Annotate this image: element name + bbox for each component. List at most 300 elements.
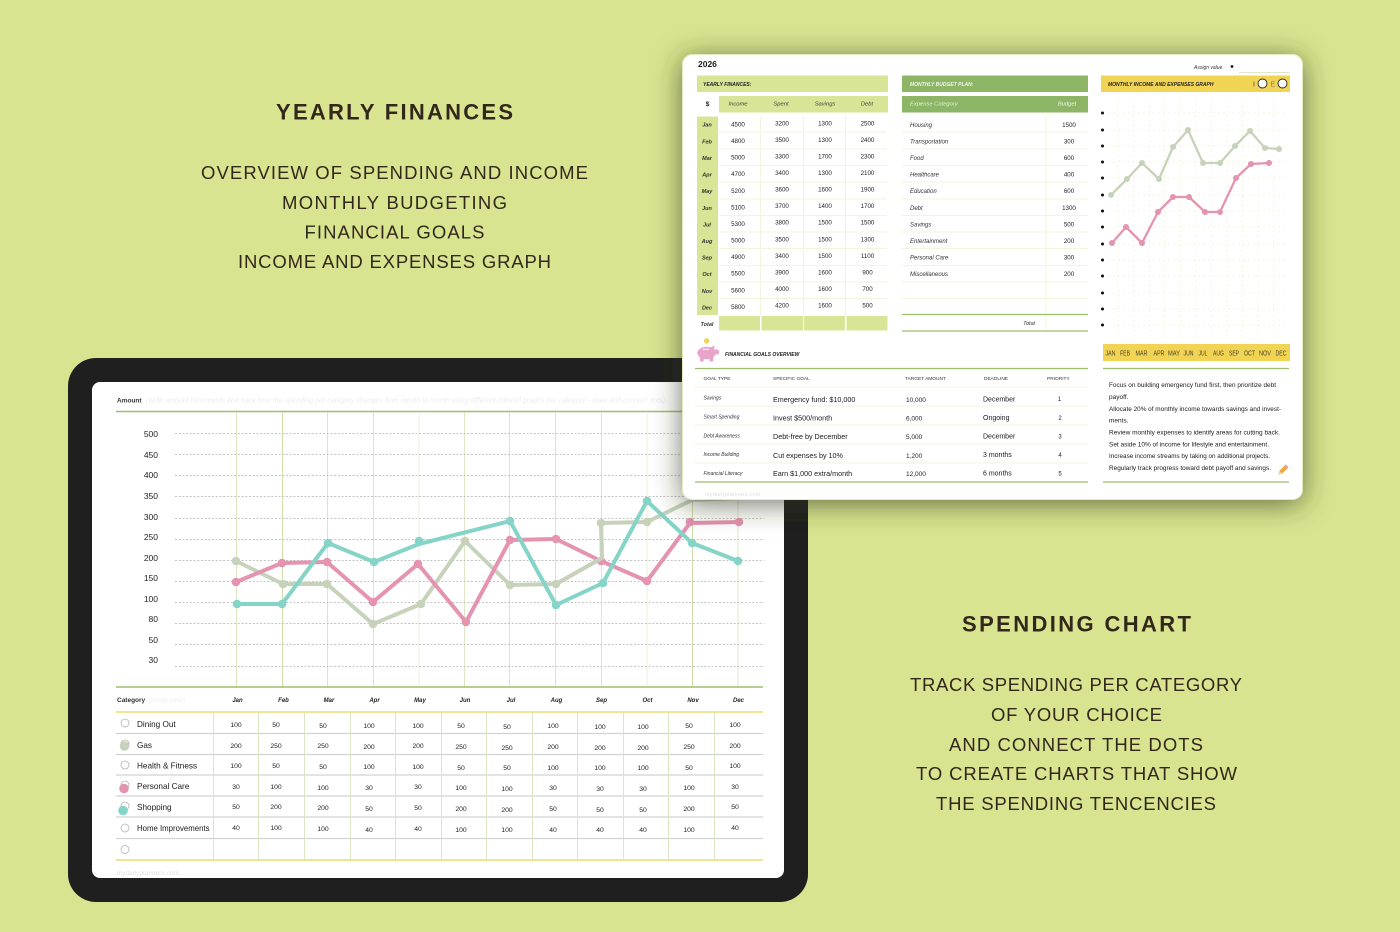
table values: 100 — [729, 763, 741, 770]
expense categories: Personal Care — [910, 256, 949, 262]
table values — [230, 722, 741, 834]
month column: Apr — [701, 172, 713, 178]
y axis labels: 200 — [144, 553, 158, 563]
income, spent, savings and debt values: 4800 — [731, 138, 745, 145]
graph heading band with legend — [1101, 76, 1290, 92]
table values: 40 — [365, 827, 373, 834]
table values: 100 — [317, 826, 329, 833]
table values: 50 — [414, 805, 422, 812]
budget values: 600 — [1064, 155, 1075, 162]
deadlines: December — [983, 434, 1016, 440]
table values: 50 — [232, 804, 240, 811]
income, spent, savings and debt values: 4200 — [775, 302, 789, 310]
income, spent, savings and debt values: 1500 — [818, 253, 832, 260]
icon: pencil — [1276, 464, 1289, 477]
y axis labels: 30 — [149, 655, 158, 665]
specific goals: Emergency fund: $10,000 — [773, 395, 855, 404]
panel: yearly finances planner page — [682, 54, 1302, 500]
table values: 200 — [317, 805, 329, 812]
table values: 200 — [637, 745, 649, 752]
income, spent, savings and debt values: 5600 — [731, 288, 745, 294]
month column: Dec — [702, 306, 712, 312]
table header: (assign color) — [149, 698, 185, 704]
income, spent, savings and debt values: 2300 — [861, 154, 875, 160]
text block: spending chart description: THE SPENDING TENCENCIES — [936, 793, 1216, 814]
target amounts: 10,000 — [906, 397, 926, 404]
income, spent, savings and debt values: 3500 — [775, 137, 789, 144]
table values: 50 — [731, 804, 739, 811]
y axis labels: 50 — [149, 635, 158, 645]
table header: Dec — [733, 698, 745, 704]
table values: 200 — [455, 806, 467, 813]
table values: 50 — [639, 807, 647, 814]
graph month band: JAN — [1106, 350, 1116, 358]
goals table header: GOAL TYPE — [704, 376, 730, 382]
table header: Feb — [278, 698, 289, 704]
goal types: Income Building — [704, 452, 739, 458]
expense categories: Transportation — [910, 140, 949, 146]
table values: 50 — [503, 765, 511, 772]
table values: 100 — [455, 785, 467, 792]
budget values: 500 — [1064, 222, 1075, 228]
budget values: 200 — [1064, 238, 1075, 245]
month column: Jan — [702, 122, 712, 128]
icon: piggy bank with coin — [697, 338, 719, 362]
graph month band: OCT — [1244, 350, 1256, 358]
y axis labels: 300 — [144, 512, 158, 522]
income, spent, savings and debt values: 1600 — [818, 270, 832, 276]
expense categories: Food — [910, 156, 924, 162]
table values: 250 — [270, 743, 282, 750]
total row: Total — [701, 322, 714, 328]
series: sage crossing segment — [556, 523, 602, 584]
column headers: Savings — [815, 102, 835, 108]
budget heading band: MONTHLY BUDGET PLAN: — [910, 82, 974, 88]
income, spent, savings and debt values: 1500 — [861, 220, 875, 226]
income, spent, savings and debt values: 5300 — [731, 221, 745, 228]
table header: Category — [117, 697, 146, 704]
income, spent, savings and debt values: 1300 — [818, 137, 832, 144]
notes text: Focus on building emergency fund first, then prioritize debt — [1109, 382, 1276, 389]
column headers — [706, 96, 888, 112]
table header: May — [414, 698, 426, 704]
table values: 50 — [319, 764, 327, 771]
y axis labels: 450 — [144, 450, 158, 460]
notes text — [1109, 382, 1281, 472]
table values: 40 — [639, 827, 647, 834]
deadlines: 6 months — [983, 470, 1012, 478]
series: pink — [232, 518, 743, 626]
goals table lines — [695, 368, 1088, 482]
table values: 100 — [501, 786, 513, 793]
budget header band — [902, 96, 1088, 112]
income, spent, savings and debt values: 1400 — [818, 203, 832, 210]
category names: Home Improvements — [137, 824, 210, 833]
table values: 50 — [685, 723, 693, 730]
table header: Aug — [550, 698, 563, 704]
goals table header: SPECIFIC GOAL — [773, 376, 810, 382]
text block: spending chart description — [910, 674, 1242, 814]
income, spent, savings and debt values: 3500 — [775, 236, 789, 244]
income, spent, savings and debt values: 3300 — [775, 154, 789, 160]
chart instruction line — [116, 398, 690, 412]
deadlines: Ongoing — [983, 415, 1010, 422]
goal types — [704, 396, 743, 477]
income, spent, savings and debt values: 3700 — [775, 203, 789, 210]
table values: 50 — [596, 807, 604, 814]
deadlines — [983, 396, 1016, 478]
color swatches — [118, 719, 129, 854]
text block: spending chart description: AND CONNECT THE DOTS — [949, 734, 1203, 755]
table values: 100 — [594, 724, 606, 731]
graph heading band with legend: I — [1253, 82, 1255, 88]
graph heading band with legend: MONTHLY INCOME AND EXPENSES GRAPH — [1108, 82, 1214, 88]
graph heading band with legend: E — [1270, 82, 1276, 88]
target amounts — [906, 397, 926, 478]
table values: 100 — [501, 827, 513, 834]
income, spent, savings and debt values: 900 — [862, 270, 873, 276]
table values: 100 — [270, 784, 282, 791]
line chart: spending per category — [144, 412, 764, 687]
specific goals: Invest $500/month — [773, 414, 832, 422]
income, spent, savings and debt values: 700 — [862, 286, 873, 293]
budget values: 1300 — [1062, 205, 1076, 212]
section: monthly budget plan — [902, 76, 1088, 331]
table values: 40 — [232, 825, 240, 832]
text block: spending chart description: TRACK SPENDING PER CATEGORY — [910, 674, 1242, 695]
text block: yearly finances features: OVERVIEW OF SPENDING AND INCOME — [201, 162, 588, 183]
assign value — [1193, 65, 1290, 72]
graph month band: MAR — [1136, 350, 1148, 358]
section: yearly finances table — [697, 76, 888, 330]
income, spent, savings and debt values: 5800 — [731, 304, 745, 311]
target amounts: 5,000 — [906, 434, 923, 441]
table header — [117, 697, 745, 704]
y axis labels — [144, 429, 158, 665]
budget values: 200 — [1064, 271, 1075, 278]
notes text: Review monthly expenses to identify areas for cutting back. — [1109, 430, 1280, 436]
graph month band: MAY — [1168, 350, 1180, 358]
table values: 100 — [547, 723, 559, 730]
column headers: $ — [706, 101, 710, 108]
income, spent, savings and debt values: 1600 — [818, 286, 832, 293]
table values: 100 — [363, 723, 375, 730]
table values: 50 — [685, 765, 693, 772]
goal types: Smart Spending — [704, 414, 740, 420]
expense categories: Housing — [910, 123, 933, 129]
column headers: Spent — [773, 102, 789, 108]
income, spent, savings and debt values: 3900 — [775, 270, 789, 276]
series: expenses — [1109, 160, 1272, 246]
graph month band: FEB — [1120, 350, 1130, 358]
watermark: mydailyplanners.com — [117, 871, 179, 877]
income, spent, savings and debt values: 4900 — [731, 254, 745, 261]
income, spent, savings and debt values: 3200 — [775, 120, 789, 128]
notes text: Increase income streams by taking on additional projects. — [1109, 453, 1270, 460]
income, spent, savings and debt values: 2100 — [861, 170, 875, 177]
category names: Personal Care — [137, 782, 190, 791]
deadlines: December — [983, 396, 1016, 404]
table values: 100 — [230, 763, 242, 770]
income, spent, savings and debt values: 5200 — [731, 188, 745, 195]
table values: 50 — [457, 723, 465, 730]
heading: spending chart: SPENDING CHART — [962, 612, 1192, 636]
priorities: 2 — [1058, 416, 1062, 422]
chart instruction line: (write amount increments and track how the spending per category changes from month to month using different colored graphs per category - draw and connect dots). — [146, 398, 667, 404]
budget header band: Expense Category — [910, 102, 959, 108]
chart instruction line: Amount — [117, 398, 142, 404]
income, spent, savings and debt values: 1300 — [818, 120, 832, 128]
goals table header: DEADLINE — [984, 376, 1008, 382]
income, spent, savings and debt values: 2500 — [861, 120, 875, 128]
month column: Sep — [702, 256, 713, 262]
budget heading band — [902, 76, 1088, 92]
text block: yearly finances features: INCOME AND EXPENSES GRAPH — [238, 251, 551, 272]
budget values: 400 — [1064, 172, 1075, 178]
table values: 100 — [637, 765, 649, 772]
expense categories — [910, 123, 949, 278]
table values: 50 — [272, 722, 280, 729]
y axis labels: 250 — [144, 532, 158, 542]
budget values: 600 — [1064, 188, 1075, 195]
year: 2026 — [698, 59, 717, 69]
income, spent, savings and debt values: 1700 — [861, 203, 875, 210]
income, spent, savings and debt values: 1700 — [818, 154, 832, 160]
table values: 30 — [639, 786, 647, 793]
table values: 50 — [503, 724, 511, 731]
table values: 40 — [549, 827, 557, 834]
y axis labels: 100 — [144, 594, 158, 604]
table values: 200 — [270, 804, 282, 811]
table values: 50 — [272, 763, 280, 770]
income, spent, savings and debt values: 5000 — [731, 238, 745, 244]
section heading band — [697, 76, 888, 92]
graph grid — [1108, 100, 1286, 338]
specific goals — [773, 395, 855, 478]
priorities — [1058, 397, 1062, 478]
table header: Jan — [232, 698, 243, 704]
specific goals: Cut expenses by 10% — [773, 451, 844, 460]
table header: Nov — [687, 698, 699, 704]
income, spent, savings and debt values: 3400 — [775, 253, 789, 260]
text block: spending chart description: OF YOUR CHOICE — [991, 704, 1162, 725]
budget total: Total — [1023, 321, 1036, 327]
budget values: 1500 — [1062, 122, 1076, 129]
table values: 100 — [412, 764, 424, 771]
category names — [137, 720, 210, 833]
income, spent, savings and debt values: 4500 — [731, 122, 745, 128]
target amounts: 1,200 — [906, 453, 923, 460]
goals table header — [704, 376, 1070, 382]
income, spent, savings and debt values: 500 — [862, 302, 873, 310]
table values: 200 — [683, 806, 695, 813]
expense categories: Savings — [910, 222, 931, 228]
priorities: 5 — [1058, 472, 1062, 478]
table values: 250 — [455, 744, 467, 751]
table values: 200 — [230, 743, 242, 750]
table header: Oct — [642, 698, 653, 704]
category names: Dining Out — [137, 720, 176, 729]
series: sage — [232, 498, 738, 628]
month column: Aug — [701, 239, 713, 245]
income, spent, savings and debt values: 4700 — [731, 171, 745, 178]
expense categories: Miscellaneous — [910, 272, 948, 278]
income, spent, savings and debt values: 1600 — [818, 302, 832, 310]
table values: 30 — [232, 784, 240, 791]
expense categories: Debt — [910, 206, 923, 212]
assign value: Assign value — [1193, 65, 1223, 71]
table values: 200 — [363, 744, 375, 751]
table values: 100 — [230, 722, 242, 729]
income, spent, savings and debt values: 3400 — [775, 170, 789, 177]
expense categories: Education — [910, 189, 937, 195]
y axis labels: 500 — [144, 429, 158, 439]
budget values: 300 — [1064, 138, 1075, 146]
table: spending per category — [116, 687, 763, 860]
table values: 100 — [729, 722, 741, 729]
income, spent, savings and debt values: 1500 — [818, 220, 832, 226]
goals table header: PRIORITY — [1047, 376, 1070, 382]
goal types: Savings — [704, 396, 722, 402]
table values: 100 — [683, 785, 695, 792]
income, spent, savings and debt values: 5500 — [731, 270, 745, 278]
watermark: mydailyplanners.com — [705, 492, 761, 498]
month column: Mar — [702, 156, 713, 162]
month column: Nov — [702, 289, 713, 295]
table header: Sep — [596, 698, 607, 704]
expense categories: Healthcare — [910, 172, 940, 178]
priorities: 3 — [1058, 434, 1062, 440]
income, spent, savings and debt values: 5100 — [731, 204, 745, 212]
graph month band: JUN — [1184, 350, 1194, 358]
row lines — [719, 116, 887, 315]
tablet screen — [92, 382, 784, 878]
table values: 250 — [317, 743, 329, 750]
total row — [701, 316, 888, 330]
table values: 40 — [731, 825, 739, 832]
goal types: Financial Literacy — [704, 471, 743, 477]
month column — [697, 116, 718, 315]
graph month band: JUL — [1198, 350, 1208, 358]
table values: 30 — [549, 785, 557, 792]
column headers: Income — [728, 102, 748, 108]
y axis labels: 150 — [144, 573, 158, 583]
table values: 30 — [365, 785, 373, 792]
table values: 100 — [363, 764, 375, 771]
graph axis dots — [1101, 112, 1104, 326]
income, spent, savings and debt values: 1500 — [818, 236, 832, 244]
month column: Jul — [703, 222, 711, 228]
income, spent, savings and debt values: 1300 — [818, 170, 832, 177]
graph month band: APR — [1154, 350, 1164, 358]
target amounts: 6,000 — [906, 416, 923, 422]
table values: 100 — [455, 827, 467, 834]
table values: 250 — [683, 744, 695, 751]
table values: 100 — [547, 765, 559, 772]
goals table header: TARGET AMOUNT — [905, 376, 946, 382]
tablet frame — [68, 358, 808, 902]
table values: 200 — [547, 744, 559, 751]
table values: 100 — [594, 765, 606, 772]
panel: tablet with spending chart — [68, 358, 808, 902]
table values: 50 — [319, 723, 327, 730]
table values: 30 — [596, 786, 604, 793]
series: teal — [233, 497, 742, 609]
priorities: 4 — [1058, 453, 1062, 459]
series: income — [1108, 127, 1282, 198]
income, spent, savings and debt values: 5000 — [731, 154, 745, 162]
table values: 100 — [683, 827, 695, 834]
column headers: Debt — [861, 102, 874, 108]
table values: 100 — [317, 785, 329, 792]
table values: 30 — [731, 784, 739, 791]
notes text: Set aside 10% of income for lifestyle and entertainment. — [1109, 442, 1269, 448]
notes text: Allocate 20% of monthly income towards savings and invest- — [1109, 406, 1281, 413]
income, spent, savings and debt values — [731, 120, 875, 311]
graph month band: AUG — [1213, 350, 1224, 358]
category names: Health & Fitness — [137, 762, 197, 770]
table header: Jul — [507, 698, 516, 704]
graph month band: DEC — [1276, 350, 1286, 358]
text block: yearly finances features: MONTHLY BUDGETING — [282, 192, 507, 213]
table values: 200 — [594, 745, 606, 752]
table header: Jun — [460, 698, 471, 704]
section heading band: YEARLY FINANCES: — [703, 82, 752, 88]
table values: 100 — [412, 723, 424, 730]
section: notes — [1103, 368, 1289, 482]
expense categories: Entertainment — [910, 239, 948, 245]
budget header band: Budget — [1058, 102, 1077, 108]
table values: 100 — [637, 724, 649, 731]
category names: Shopping — [137, 803, 172, 812]
text block: yearly finances features: FINANCIAL GOALS — [304, 222, 484, 242]
table values: 50 — [549, 806, 557, 813]
budget values — [1062, 122, 1076, 278]
specific goals: Debt-free by December — [773, 432, 848, 441]
notes text: Regularly track progress toward debt payoff and savings. — [1109, 465, 1271, 472]
table values: 200 — [729, 743, 741, 750]
table values: 50 — [457, 765, 465, 772]
income, spent, savings and debt values: 1300 — [861, 236, 875, 244]
income, spent, savings and debt values: 3600 — [775, 186, 789, 194]
notes text: ments. — [1109, 418, 1129, 424]
section: monthly income and expenses graph — [1101, 76, 1290, 361]
goals title: FINANCIAL GOALS OVERVIEW — [725, 352, 801, 358]
income, spent, savings and debt values: 1900 — [861, 186, 875, 194]
table values: 30 — [414, 784, 422, 791]
heading: yearly finances: YEARLY FINANCES — [276, 100, 513, 124]
category names: Gas — [137, 741, 152, 750]
table values: 250 — [501, 745, 513, 752]
deadlines: 3 months — [983, 452, 1012, 459]
goal types: Debt Awareness — [704, 434, 740, 440]
budget grid lines — [902, 116, 1088, 330]
table header: Mar — [324, 698, 335, 704]
graph month band: SEP — [1229, 350, 1239, 358]
income, spent, savings and debt values: 3800 — [775, 220, 789, 226]
income, spent, savings and debt values: 2400 — [861, 137, 875, 144]
table values: 50 — [365, 806, 373, 813]
notes text: payoff. — [1109, 394, 1129, 401]
budget values: 300 — [1064, 254, 1075, 262]
y axis labels: 400 — [144, 470, 158, 480]
income, spent, savings and debt values: 4000 — [775, 286, 789, 293]
priorities: 1 — [1058, 397, 1062, 403]
table values: 40 — [596, 827, 604, 834]
text block: yearly finances features — [201, 162, 588, 272]
text block: spending chart description: TO CREATE CHARTS THAT SHOW — [916, 763, 1238, 784]
target amounts: 12,000 — [906, 471, 926, 478]
